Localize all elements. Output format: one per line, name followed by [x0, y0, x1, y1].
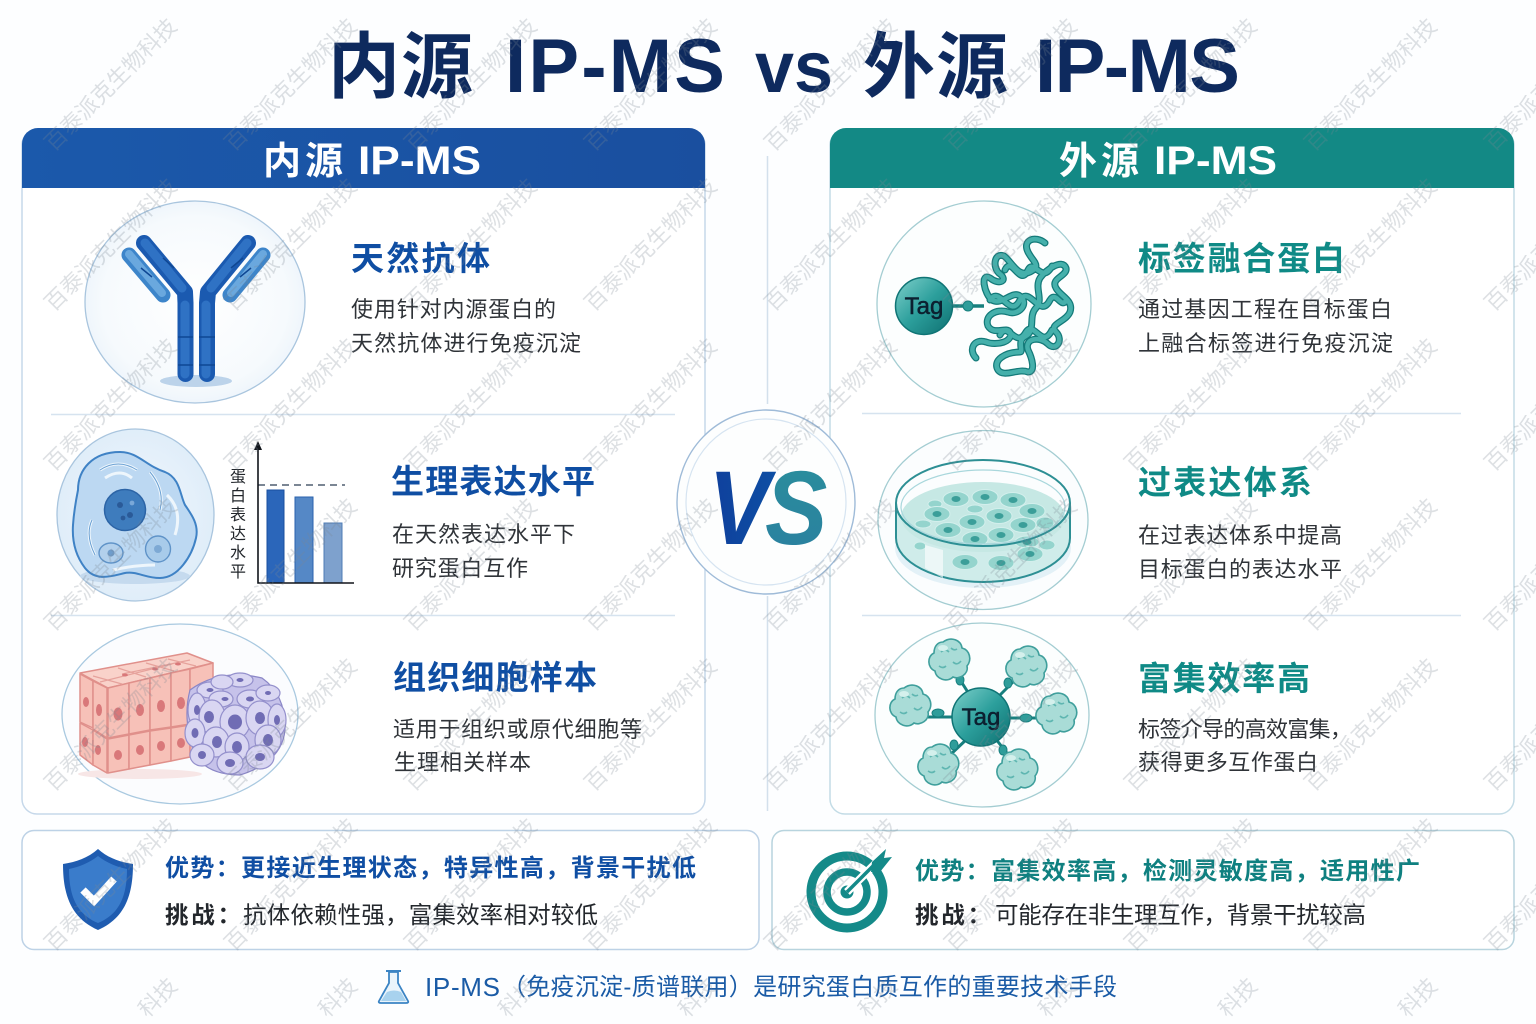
watermark: 百泰派克生物科技	[220, 654, 362, 796]
panel heading text: endogenous	[263, 139, 481, 183]
watermark: 百泰派克生物科技	[940, 14, 1082, 156]
watermark: 百泰派克生物科技	[1300, 334, 1442, 476]
watermark: 百泰派克生物科技	[400, 334, 542, 476]
advantage text: endogenous: 优势：更接近生理状态，特异性高，背景干扰低	[165, 855, 696, 882]
description: overexpression system: 目标蛋白的表达水平	[1138, 557, 1342, 582]
advantage text: exogenous: 优势：富集效率高，检测灵敏度高，适用性广	[915, 857, 1420, 885]
challenge text: exogenous: 挑战：	[915, 902, 991, 928]
icon: flask	[379, 971, 408, 1003]
watermark: 百泰派克生物科技	[940, 814, 1082, 956]
watermark: 百泰派克生物科技	[760, 174, 902, 316]
watermark: 百泰派克生物科技	[220, 334, 362, 476]
icon: petri dish	[878, 430, 1088, 610]
item: tissue and primary cells	[62, 624, 642, 804]
axis label: 达	[230, 525, 246, 543]
axis label: 白	[230, 487, 246, 505]
watermark: 百泰派克生物科技	[400, 654, 542, 796]
watermark: 百泰派克生物科技	[1300, 14, 1442, 156]
title: IP-MS	[1035, 24, 1240, 109]
axis label: 蛋	[230, 468, 246, 486]
panel header: exogenous	[830, 128, 1514, 188]
panel heading text: exogenous: IP-MS	[1154, 139, 1277, 183]
item: natural antibody	[85, 201, 581, 403]
icon: tag fusion protein	[877, 201, 1091, 407]
heading: tissue and primary cells: 组织细胞样本	[393, 659, 597, 696]
purple cell cluster	[187, 675, 285, 775]
heading: tag fusion protein: 标签融合蛋白	[1138, 240, 1345, 277]
description: natural antibody: 使用针对内源蛋白的	[351, 297, 556, 322]
watermark: 百泰派克生物科技	[40, 494, 182, 636]
watermark: 百泰派克生物科技	[760, 814, 902, 956]
description: tissue and primary cells: 生理相关样本	[394, 750, 531, 775]
item: high enrichment efficiency	[875, 623, 1352, 807]
watermark: 百泰派克生物科技	[1120, 814, 1262, 956]
watermark: 百泰派克生物科技	[760, 494, 902, 636]
centre divider line	[766, 156, 768, 811]
heading: natural antibody: 天然抗体	[351, 240, 490, 277]
description: high enrichment efficiency	[1138, 717, 1352, 775]
watermark: 百泰派克生物科技	[220, 174, 362, 316]
watermark: 百泰派克生物科技	[940, 334, 1082, 476]
watermark: 百泰派克生物科技	[220, 14, 362, 156]
heading: physiological expression: 生理表达水平	[391, 463, 595, 500]
watermark: 百泰派克生物科技	[1120, 334, 1262, 476]
panel heading text: exogenous	[1059, 139, 1277, 183]
watermark: 百泰派克生物科技	[940, 174, 1082, 316]
title: 外源	[863, 28, 1008, 108]
axis label: 平	[230, 564, 246, 581]
challenge text: exogenous: 可能存在非生理互作，背景干扰较高	[995, 902, 1366, 928]
description: overexpression system	[1138, 523, 1342, 582]
VS badge: S	[765, 450, 827, 567]
item: tag fusion protein	[877, 201, 1393, 407]
panel heading text: endogenous: IP-MS	[358, 139, 481, 183]
title	[328, 24, 1240, 109]
panel header: endogenous	[22, 128, 705, 188]
challenge text: endogenous: 抗体依赖性强，富集效率相对较低	[243, 902, 598, 928]
description: tag fusion protein: 上融合标签进行免疫沉淀	[1138, 331, 1393, 356]
watermark: 科技	[313, 973, 362, 1022]
watermark: 百泰派克生物科技	[580, 814, 722, 956]
watermark: 百泰派克生物科技	[40, 174, 182, 316]
watermark: 科技	[133, 973, 182, 1022]
description: physiological expression: 研究蛋白互作	[392, 556, 528, 581]
item: overexpression system	[878, 430, 1342, 610]
description: high enrichment efficiency: 获得更多互作蛋白	[1138, 750, 1318, 775]
icon: target with arrow	[811, 849, 892, 928]
watermark: 百泰派克生物科技	[940, 494, 1082, 636]
description: overexpression system: 在过表达体系中提高	[1138, 523, 1342, 548]
axis label	[230, 468, 246, 581]
watermark: 百泰派克生物科技	[400, 494, 542, 636]
watermark: 百泰派克生物科技	[1300, 494, 1442, 636]
watermark: 百泰派克生物科技	[760, 654, 902, 796]
icon: tissue cells	[62, 624, 298, 804]
watermark: 科技	[493, 973, 542, 1022]
panel: exogenous IP-MS	[830, 128, 1514, 814]
icon: tag fusion protein: Tag	[905, 293, 943, 320]
description: tissue and primary cells: 适用于组织或原代细胞等	[393, 717, 642, 742]
panel heading text: endogenous: 内源	[263, 141, 343, 183]
panel: endogenous IP-MS	[22, 128, 705, 814]
summary panel: endogenous pros and cons	[22, 830, 759, 950]
axis label: 表	[230, 506, 246, 524]
description: high enrichment efficiency: 标签介导的高效富集，	[1138, 717, 1352, 742]
watermark: 科技	[1033, 973, 1082, 1022]
watermark: 百泰派克生物科技	[1300, 654, 1442, 796]
footer text: （免疫沉淀-质谱联用）是研究蛋白质互作的重要技术手段	[502, 974, 1117, 1001]
title: IP-MS	[505, 24, 725, 109]
axis label: 水	[230, 544, 246, 562]
watermark: 百泰派克生物科技	[400, 14, 542, 156]
watermark: 百泰派克生物科技	[1300, 814, 1442, 956]
description: natural antibody: 天然抗体进行免疫沉淀	[351, 331, 581, 356]
watermark: 百泰派克生物科技	[940, 654, 1082, 796]
icon: cell	[57, 429, 214, 601]
pink tissue block	[80, 653, 213, 773]
watermark: 百泰派克生物科技	[220, 494, 362, 636]
item: physiological expression	[57, 429, 595, 601]
watermark: 科技	[1393, 973, 1442, 1022]
watermark: 百泰派克生物科技	[1120, 14, 1262, 156]
description: tissue and primary cells	[393, 717, 642, 775]
icon: tag enrichment	[875, 623, 1089, 807]
icon: antibody	[85, 201, 305, 403]
description: physiological expression: 在天然表达水平下	[392, 522, 575, 547]
description: tag fusion protein	[1138, 297, 1393, 356]
VS badge	[677, 410, 855, 594]
summary panel: exogenous pros and cons	[772, 830, 1514, 950]
watermark: 百泰派克生物科技	[580, 334, 722, 476]
watermark: 百泰派克生物科技	[40, 14, 182, 156]
description: natural antibody	[351, 297, 581, 356]
watermark: 百泰派克生物科技	[580, 494, 722, 636]
VS badge: V	[708, 449, 776, 566]
footer note	[379, 971, 1117, 1003]
watermark: 百泰派克生物科技	[40, 334, 182, 476]
watermark: 百泰派克生物科技	[400, 814, 542, 956]
watermark: 百泰派克生物科技	[580, 174, 722, 316]
watermark: 百泰派克生物科技	[220, 814, 362, 956]
watermark: 科技	[1213, 973, 1262, 1022]
watermark: 百泰派克生物科技	[1120, 174, 1262, 316]
watermark: 百泰派克生物科技	[1120, 494, 1262, 636]
watermark: 百泰派克生物科技	[1300, 174, 1442, 316]
title: vs	[755, 28, 833, 108]
watermark: 科技	[853, 973, 902, 1022]
heading: high enrichment efficiency: 富集效率高	[1138, 660, 1310, 697]
watermark: 百泰派克生物科技	[40, 814, 182, 956]
description: tag fusion protein: 通过基因工程在目标蛋白	[1138, 297, 1392, 322]
title: 内源	[328, 28, 473, 108]
icon: tag enrichment: Tag	[962, 704, 1000, 731]
challenge text: endogenous: 挑战：	[165, 902, 241, 928]
heading: overexpression system: 过表达体系	[1138, 464, 1312, 501]
watermark: 百泰派克生物科技	[760, 334, 902, 476]
footer text: IP-MS	[425, 972, 500, 1002]
icon: shield with check	[63, 849, 133, 930]
panel heading text: exogenous: 外源	[1059, 141, 1139, 183]
watermark: 百泰派克生物科技	[40, 654, 182, 796]
watermark: 百泰派克生物科技	[580, 654, 722, 796]
bar chart: protein expression level	[230, 441, 354, 583]
watermark: 百泰派克生物科技	[580, 14, 722, 156]
watermark: 百泰派克生物科技	[400, 174, 542, 316]
watermark: 科技	[673, 973, 722, 1022]
watermark: 百泰派克生物科技	[760, 14, 902, 156]
watermark: 百泰派克生物科技	[1120, 654, 1262, 796]
description: physiological expression	[392, 522, 575, 581]
